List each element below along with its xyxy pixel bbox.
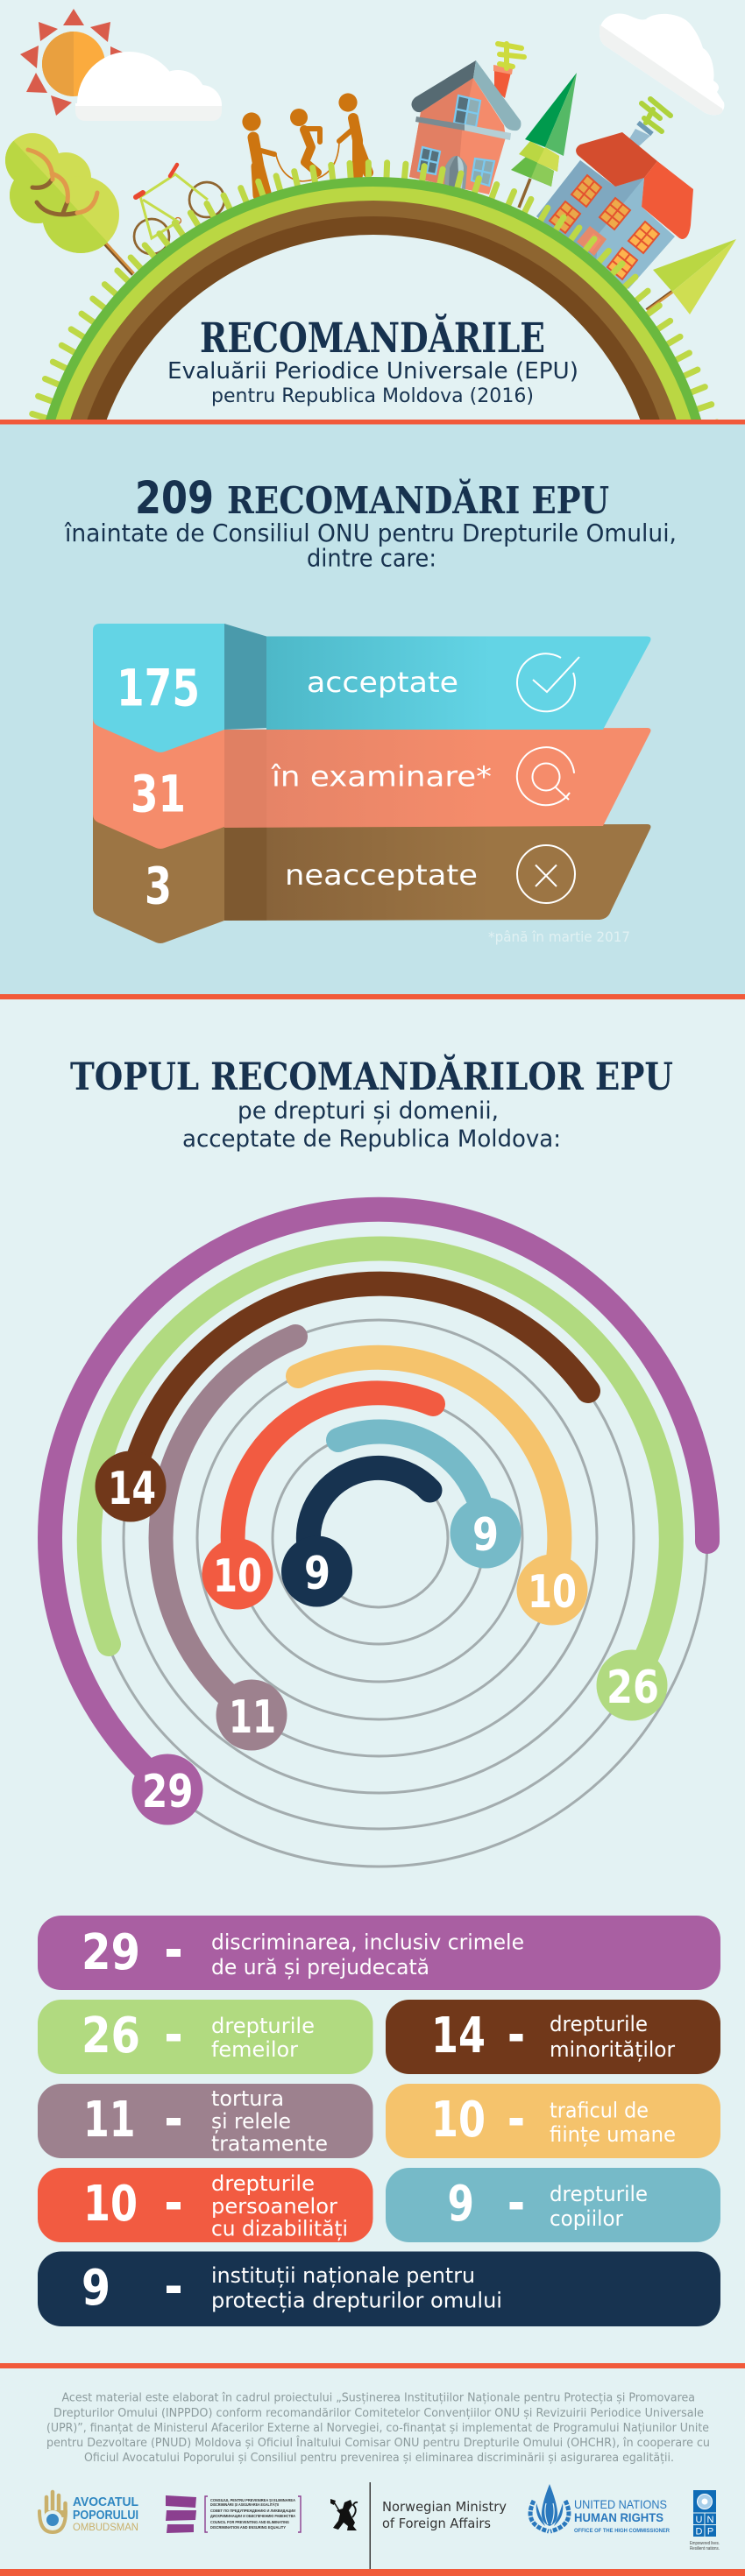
- heading: topul recomandarilor: [70, 1054, 673, 1153]
- badge: 10 red: 10: [213, 1550, 262, 1603]
- logo: Council for preventing discrimination: DISCRIMINATION AND ENSURING EQUALITY: [210, 2525, 286, 2530]
- ribbon: neacceptate: 3: [145, 857, 172, 916]
- badge: 11: [216, 1680, 287, 1750]
- chart: concentric rings: [50, 1210, 707, 1867]
- logo: Norwegian Ministry of Foreign Affairs: Norwegian Ministry: [382, 2499, 507, 2515]
- divider: [370, 2482, 371, 2569]
- footer text: Acest material este elaborat în cadrul proiectului „Susținerea Instituțiilor Naționale pentru Protecția și Promovarea: [61, 2391, 695, 2405]
- logo: Avocatul Poporului: AVOCATUL: [73, 2495, 138, 2509]
- panel: 209 recommendations: [64, 473, 677, 945]
- footer text: [46, 2391, 710, 2465]
- legend card: 26 women: [38, 2000, 373, 2074]
- legend card: 9 national institutions: instituții naționale pentru: [211, 2263, 475, 2288]
- legend card: 29 discrimination: de ură și prejudecată: [211, 1955, 429, 1980]
- legend card: 11 torture: tratamente: [211, 2132, 328, 2156]
- ribbon: in examinare: 31: [131, 764, 186, 823]
- legend card: 29 discrimination: discriminarea, inclusiv crimele: [211, 1930, 524, 1954]
- logo: Council for preventing discrimination: CONSILIUL PENTRU PREVENIREA ȘI ELIMINAREA: [210, 2498, 296, 2502]
- legend card: 11 torture: 11: [83, 2092, 135, 2149]
- title: Evaluării Periodice Universale (EPU): [167, 358, 578, 385]
- logo: Norway lion: [330, 2499, 358, 2530]
- logo: UN Human Rights: [530, 2484, 670, 2534]
- footnote: *până în martie 2017: [488, 928, 630, 945]
- title: [167, 314, 578, 407]
- separator bar under header: [0, 420, 745, 424]
- heading: topul recomandarilor: acceptate de Republica Moldova:: [182, 1126, 561, 1153]
- title: RECOMANDĂRILE: [200, 314, 545, 362]
- legend card: 9 national institutions: 9: [82, 2260, 110, 2317]
- logo: Council for preventing discrimination: ДИСКРИМИНАЦИИ И ОБЕСПЕЧЕНИЮ РАВЕНСТВА: [210, 2514, 296, 2518]
- logo: Council for preventing discrimination: СОВЕТ ПО ПРЕДУПРЕЖДЕНИЮ И ЛИКВИДАЦИИ: [210, 2509, 295, 2513]
- logo: UNDP: [690, 2490, 720, 2551]
- badge: 9 navy: 9: [304, 1548, 330, 1600]
- legend card: 9 national institutions: [38, 2251, 720, 2326]
- legend card: 14 minorities: [386, 2000, 720, 2074]
- legend card: 10 disabilities: 10: [83, 2176, 138, 2233]
- logo: Council for preventing discrimination: DISCRIMINĂRII ȘI ASIGURAREA EGALITĂȚII: [210, 2502, 279, 2507]
- badge: 9 navy: [281, 1536, 352, 1606]
- heading: 209 recomandari: [64, 473, 677, 573]
- legend card: 9 national institutions: protecția drepturilor omului: [211, 2288, 502, 2312]
- panel: header illustration: [5, 9, 736, 862]
- icon: cloud left: [75, 52, 222, 121]
- legend card: 9 children: drepturile: [550, 2182, 648, 2206]
- icon: blue house: [536, 99, 693, 289]
- legend card: 10 trafficking: 10: [431, 2092, 486, 2149]
- logo: UNDP: N: [707, 2515, 714, 2525]
- badge: 10 yellow: 10: [528, 1566, 577, 1619]
- logo: UN Human Rights: UNITED NATIONS: [574, 2497, 667, 2511]
- heading: 209 recomandari: înaintate de Consiliul ONU pentru Drepturile Omului,: [64, 519, 677, 547]
- badge: 26: 26: [607, 1662, 659, 1714]
- ribbon: neacceptate: [93, 815, 650, 943]
- legend card: 9 children: 9: [447, 2176, 474, 2233]
- logo: UNDP: P: [707, 2526, 713, 2537]
- logo: Norwegian Ministry of Foreign Affairs: [382, 2499, 507, 2531]
- badge: 9 teal: 9: [472, 1509, 499, 1562]
- icon: spruce tree: [511, 73, 577, 208]
- badge: 29: 29: [142, 1766, 193, 1818]
- panel: below section two background: [0, 999, 745, 2576]
- panel: top recommendations: [0, 1054, 745, 2576]
- legend card: 10 trafficking: ființe umane: [550, 2122, 676, 2147]
- legend card: 10 disabilities: cu dizabilități: [211, 2217, 348, 2241]
- footer text: (UPR)”, finanțat de Ministerul Afacerilor Externe al Norvegiei, co-finanțat și implementat de Programului Națiunilor Unite: [46, 2421, 709, 2435]
- legend card: 10 disabilities: drepturile: [211, 2171, 315, 2196]
- badge: 9 teal: [451, 1498, 521, 1568]
- logo: UN Human Rights: HUMAN RIGHTS: [574, 2510, 663, 2524]
- icon: cloud right: [600, 14, 724, 115]
- logo: UNDP: Resilient nations.: [690, 2546, 720, 2551]
- ribbon: in examinare: [93, 718, 650, 849]
- separator bar above footer: [0, 2363, 745, 2368]
- legend card: 10 trafficking: traficul de: [550, 2099, 649, 2123]
- logo: Council for preventing discrimination: COUNCIL FOR PREVENTING AND ELIMINATING: [210, 2520, 290, 2524]
- logo: UN Human Rights: OFFICE OF THE HIGH COMMISSIONER: [574, 2528, 670, 2534]
- legend card: 9 children: [386, 2168, 720, 2242]
- badge: 11: 11: [229, 1691, 276, 1744]
- legend card: 14 minorities: drepturile: [550, 2012, 648, 2036]
- badge: 29: [131, 1754, 203, 1825]
- icon: lime tree right: [646, 239, 736, 314]
- legend card: 29 discrimination: [38, 1916, 720, 1990]
- logo: UNDP: Empowered lives.: [690, 2541, 720, 2546]
- badge: 10 yellow: [517, 1554, 587, 1626]
- heading: topul recomandarilor: pe drepturi și domenii,: [238, 1097, 499, 1125]
- footer text: Drepturilor Omului (INPPDO) conform recomandărilor Comitetelor Convențiilor ONU și Revizuirii Periodice Universale: [53, 2406, 704, 2420]
- badge: 26: [596, 1650, 668, 1720]
- heading: topul recomandarilor: TOPUL RECOMANDĂRILOR EPU: [70, 1054, 673, 1099]
- panel: section two background: [0, 424, 745, 995]
- legend card: 9 children: copiilor: [550, 2206, 623, 2231]
- ribbon: acceptate: [93, 624, 650, 752]
- legend card: 11 torture: tortura: [211, 2086, 284, 2111]
- logo: UNDP: D: [696, 2526, 703, 2537]
- logo: Avocatul Poporului: [39, 2492, 138, 2533]
- logo: Avocatul Poporului: POPORULUI: [73, 2509, 138, 2523]
- ribbon: neacceptate: neacceptate: [285, 858, 478, 892]
- bottom bar: [0, 2569, 745, 2576]
- badge: 14: 14: [108, 1463, 156, 1515]
- heading: 209 recomandari: RECOMANDĂRI EPU: [227, 477, 609, 523]
- legend card: 26 women: drepturile: [211, 2014, 315, 2038]
- legend card: 29 discrimination: 29: [82, 1924, 140, 1981]
- ribbon: acceptate: 175: [117, 659, 200, 718]
- icon: people skipping rope: [242, 93, 368, 195]
- logo: UNDP: U: [696, 2515, 703, 2525]
- footer text: pentru Dezvoltare (PNUD) Moldova și Oficiul Înaltului Comisar ONU pentru Drepturile Omului (OHCHR), în cooperare cu: [46, 2434, 710, 2450]
- grass around hill: [17, 163, 730, 634]
- heading: 209 recomandari: dintre care:: [307, 543, 436, 573]
- icon: salmon house: [409, 44, 524, 194]
- legend card: 26 women: femeilor: [211, 2037, 298, 2062]
- icon: sun: [20, 9, 124, 116]
- legend card: 10 disabilities: [38, 2168, 373, 2242]
- legend card: 10 trafficking: [386, 2084, 720, 2158]
- title: pentru Republica Moldova (2016): [211, 385, 534, 407]
- legend card: 14 minorities: 14: [431, 2008, 486, 2064]
- ribbon: acceptate: acceptate: [307, 666, 458, 699]
- heading: 209 recomandari: 209: [135, 473, 214, 525]
- logo: Council for preventing discrimination: [166, 2495, 301, 2533]
- badge: 10 red: [202, 1538, 273, 1610]
- legend card: 26 women: 26: [82, 2008, 140, 2064]
- logo: Avocatul Poporului: OMBUDSMAN: [73, 2523, 138, 2533]
- separator bar under section two: [0, 994, 745, 999]
- legend card: 11 torture: și relele: [211, 2109, 291, 2134]
- icon: bicycle: [134, 165, 224, 254]
- hill arches: [31, 177, 716, 862]
- icon: left tree: [5, 133, 133, 275]
- legend card: 14 minorities: minorităților: [550, 2037, 675, 2062]
- legend card: 11 torture: [38, 2084, 373, 2158]
- ribbon: in examinare: în examinare*: [271, 759, 492, 793]
- badge: 14: [95, 1450, 167, 1522]
- footer text: Oficiul Avocatului Poporului și Consiliul pentru prevenirea și eliminarea discriminării și asigurarea egalității.: [84, 2451, 674, 2465]
- legend card: 10 disabilities: persoanelor: [211, 2194, 337, 2219]
- logo: Norwegian Ministry of Foreign Affairs: of Foreign Affairs: [382, 2516, 491, 2531]
